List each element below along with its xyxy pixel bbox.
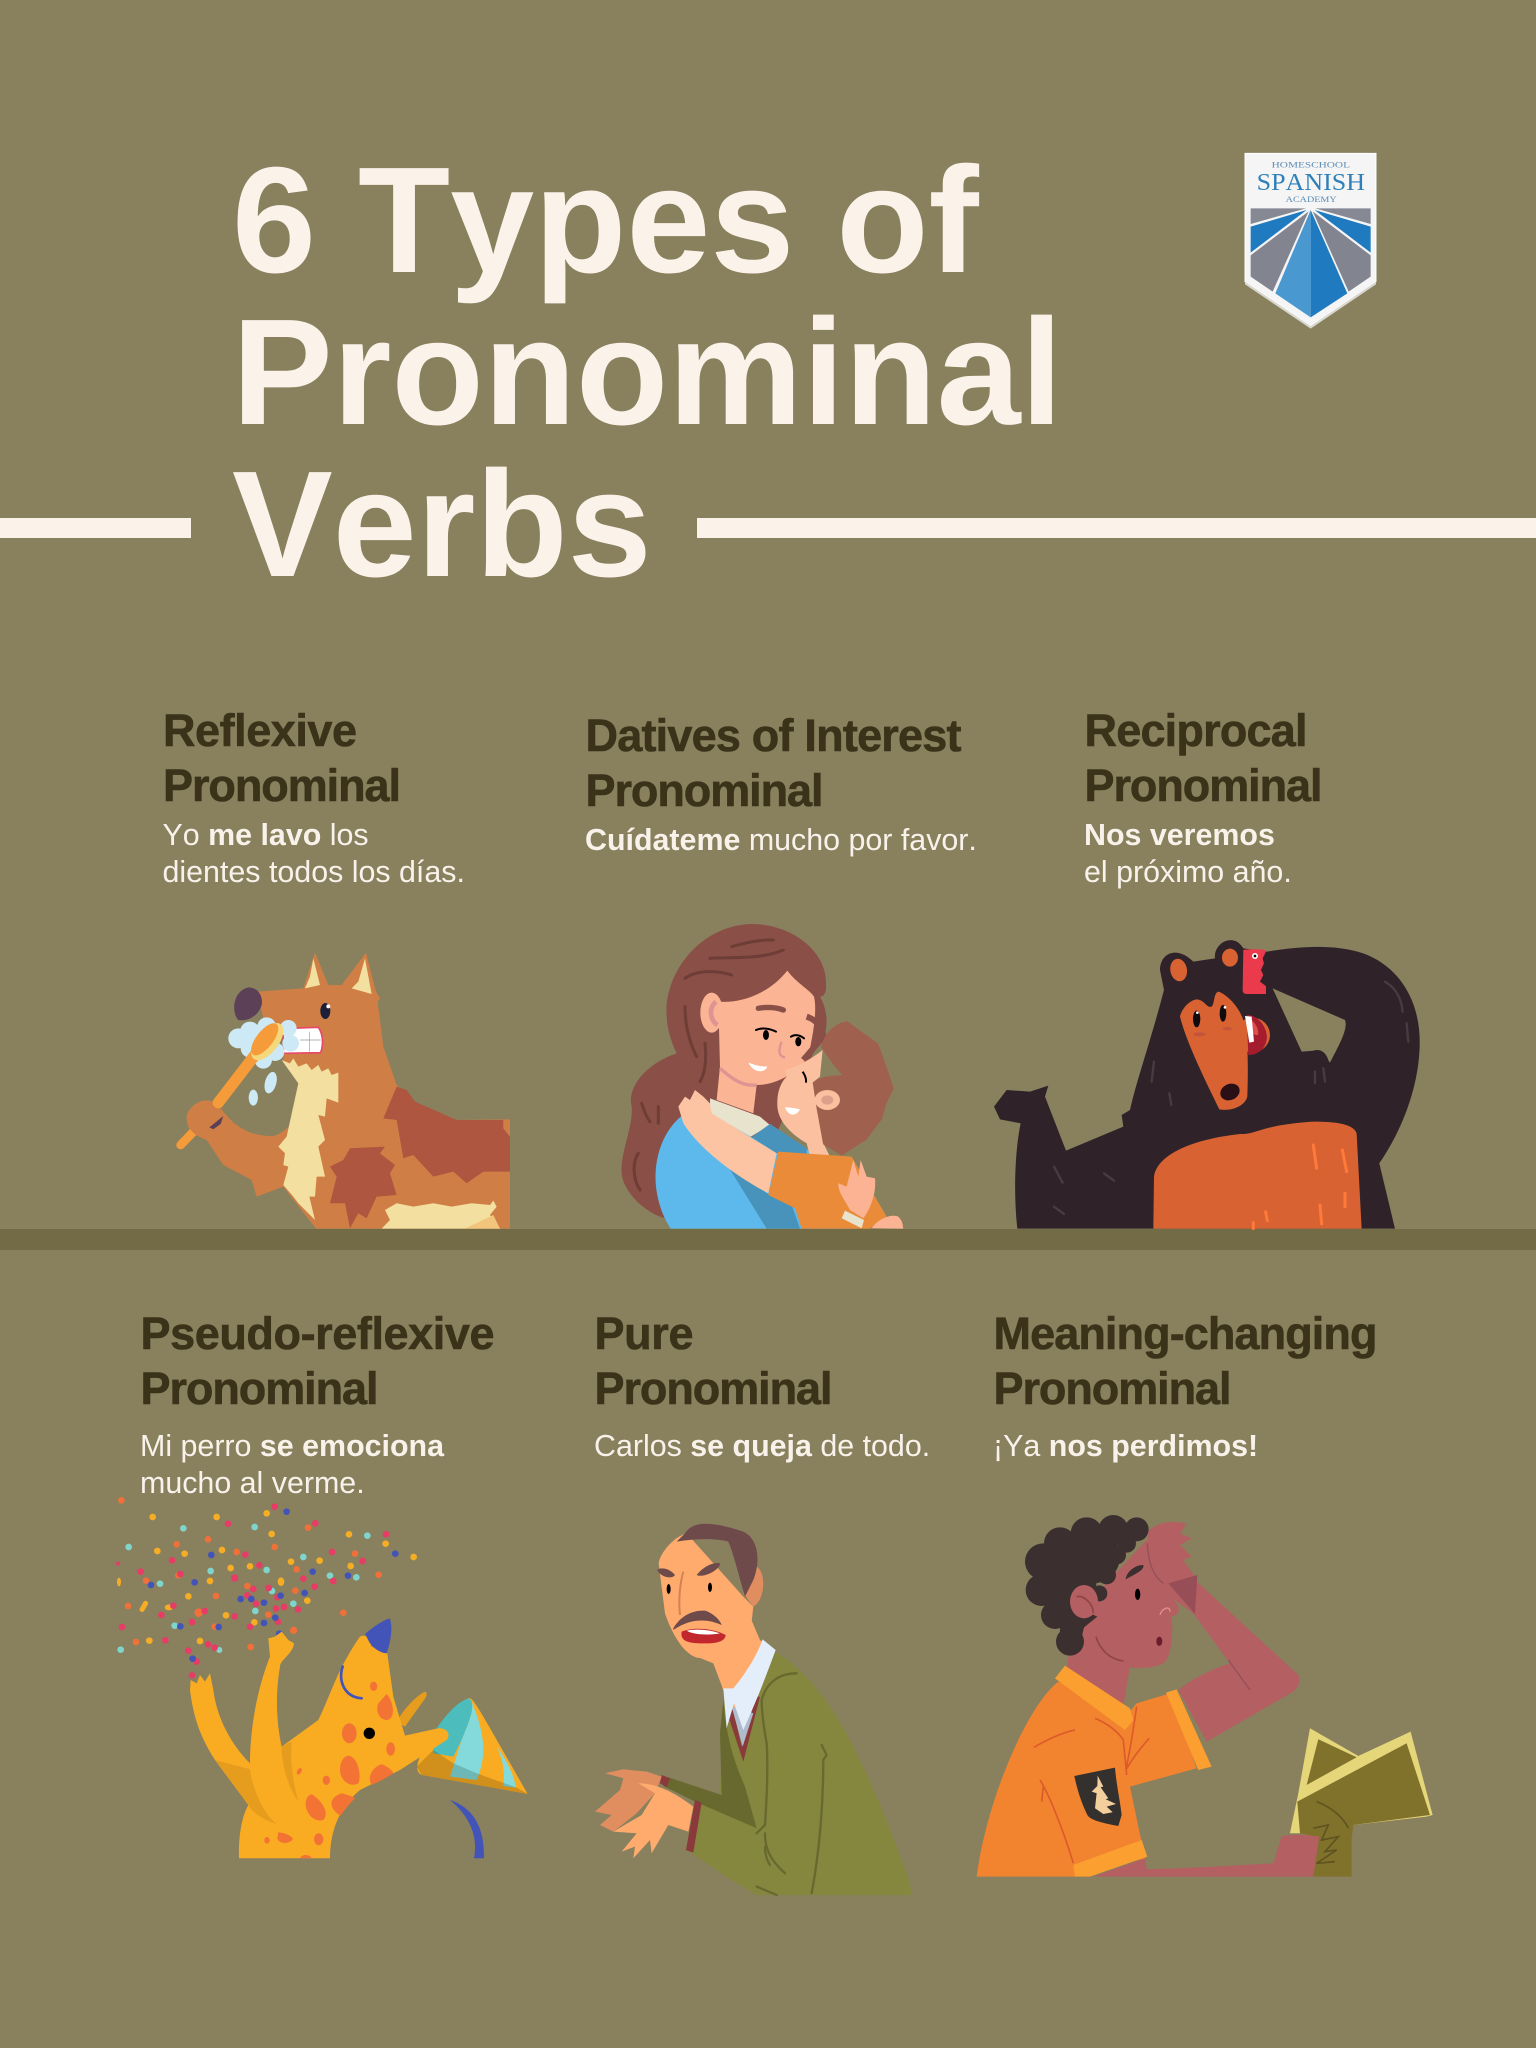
illustration: confetti: [116, 1497, 417, 1679]
logo: Homeschool Spanish Academy shield: ACADEMY: [1286, 195, 1337, 204]
panel: pure text: [594, 1308, 930, 1463]
panel: pure text: Carlos se queja de todo.: [594, 1429, 930, 1463]
panel: reflexive text: Pronominal: [163, 760, 401, 811]
panel: pseudo-reflexive text: Pronominal: [140, 1363, 378, 1414]
panel: meaning-changing text: ¡Ya nos perdimos!: [993, 1429, 1258, 1463]
panel: reflexive text: dientes todos los días.: [162, 855, 465, 889]
panel: meaning-changing text: Meaning-changing: [994, 1308, 1378, 1359]
panel: reflexive text: Reflexive: [163, 705, 357, 756]
panel: meaning-changing text: Pronominal: [994, 1363, 1232, 1414]
title: Verbs: [232, 439, 652, 608]
panel: reciprocal text: Reciprocal: [1084, 705, 1308, 756]
title: 6 Types of: [232, 135, 980, 304]
panel: reciprocal text: [1084, 705, 1322, 889]
logo: Homeschool Spanish Academy shield: HOMESCHOOL: [1272, 160, 1350, 170]
illustration: angry man in green sweater: [595, 1524, 912, 1895]
panel: datives of interest text: Pronominal: [586, 765, 824, 816]
logo: Homeschool Spanish Academy shield: SPANISH: [1257, 169, 1365, 196]
panel: reflexive text: [162, 705, 465, 889]
title: [232, 135, 1063, 608]
panel: pure text: Pure: [594, 1308, 694, 1359]
panel: reflexive text: Yo me lavo los: [162, 818, 369, 852]
illustration: dog brushing teeth: [181, 953, 510, 1229]
panel: datives of interest text: Cuídateme mucho por favor.: [585, 823, 977, 857]
panel: pseudo-reflexive text: mucho al verme.: [140, 1466, 365, 1500]
illustration: bear with comb: [994, 940, 1420, 1229]
panel: reciprocal text: Nos veremos: [1084, 818, 1275, 852]
panel: meaning-changing text: [993, 1308, 1378, 1463]
panel: reciprocal text: Pronominal: [1084, 760, 1322, 811]
title: Pronominal: [232, 287, 1063, 456]
illustration: confused boy with book: [977, 1515, 1433, 1877]
panel: pseudo-reflexive text: Mi perro se emociona: [140, 1429, 445, 1463]
panel: pseudo-reflexive text: Pseudo-reflexive: [140, 1308, 494, 1359]
panel: pure text: Pronominal: [594, 1363, 832, 1414]
panel: datives of interest text: [585, 710, 977, 857]
illustration: dog blowing party hat: [190, 1618, 528, 1858]
panel: reciprocal text: el próximo año.: [1084, 855, 1292, 889]
panel: datives of interest text: Datives of Interest: [586, 710, 962, 761]
logo: Homeschool Spanish Academy shield: [1245, 153, 1376, 329]
panel: pseudo-reflexive text: [140, 1308, 494, 1500]
illustration: mother hugging child: [622, 924, 903, 1229]
